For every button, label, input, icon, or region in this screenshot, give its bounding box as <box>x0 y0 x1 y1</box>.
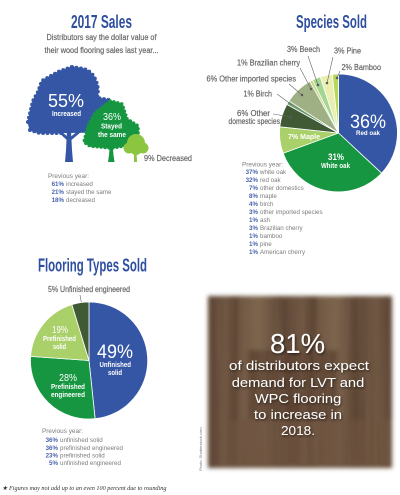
previous year list: sales <box>48 173 112 204</box>
previous year list: flooring: unfinished solid <box>60 437 103 444</box>
previous year list: species: other domestics <box>260 185 304 192</box>
callout text: demand for LVT and <box>232 375 364 390</box>
previous year list: species: 32% <box>246 177 258 184</box>
previous year list: species: 1% <box>249 217 258 224</box>
wood background <box>208 296 392 468</box>
pie value labels: species <box>288 112 386 170</box>
footnote: ★ <box>2 485 8 492</box>
title: Flooring Types Sold: Flooring Types Sold <box>38 256 147 276</box>
previous year list: sales: decreased <box>66 197 95 204</box>
species labels: 6% Other <box>237 109 270 118</box>
previous year list: species: Previous year: <box>242 162 283 168</box>
photo credit: Photo: Shutterstock.com <box>198 427 203 471</box>
previous year list: sales: 18% <box>52 197 64 204</box>
text: 55% increased: 55% <box>48 91 84 111</box>
previous year list: flooring: Previous year: <box>42 428 83 435</box>
leader line: flooring <box>80 295 82 306</box>
section: species sold <box>206 12 397 256</box>
pie value labels: flooring: 49% <box>97 342 133 363</box>
intro text <box>44 33 158 55</box>
callout text: of distributors expect <box>229 358 369 373</box>
previous year list: sales: 21% <box>52 189 64 196</box>
previous year list: species: red oak <box>260 177 282 184</box>
species labels: 3% Beech <box>287 45 320 54</box>
pie value labels: flooring: engineered <box>51 392 85 399</box>
previous year list: species: 1% <box>249 249 258 256</box>
pie value labels: species: Red oak <box>356 130 380 137</box>
pie value labels: species: 36% <box>350 112 386 133</box>
previous year list: flooring: 36% <box>46 445 58 452</box>
intro text: Distributors say the dollar value of <box>46 33 157 42</box>
previous year list: flooring: 5% <box>49 460 58 467</box>
previous year list: species: 3% <box>249 225 258 232</box>
previous year list: flooring: unfinished engineered <box>60 460 121 467</box>
previous year list: species <box>242 162 323 256</box>
pie value labels: flooring: Prefinished <box>43 336 76 343</box>
section: 2017 sales <box>28 12 192 204</box>
previous year list: flooring: 36% <box>46 437 58 444</box>
title: 2017 Sales: 2017 Sales <box>71 12 132 32</box>
text: 36% stayed the same <box>98 112 126 139</box>
previous year list: species: other imported species <box>260 209 323 216</box>
previous year list: sales: Previous year: <box>48 173 89 180</box>
previous year list: sales: increased <box>66 181 93 188</box>
callout text: 81% <box>270 328 325 359</box>
previous year list: species: American cherry <box>260 249 306 256</box>
previous year list: species: 7% <box>249 185 258 192</box>
pie value labels: flooring: solid <box>108 370 122 377</box>
previous year list: species: 1% <box>249 241 258 248</box>
pie value labels: species: 31% <box>328 152 344 163</box>
label: 9% decreased: 9% Decreased <box>144 154 192 163</box>
pie value labels: species: White oak <box>321 163 350 170</box>
text: 55% increased: Increased <box>52 111 81 118</box>
previous year list: flooring: 23% <box>46 452 58 460</box>
previous year list: species: maple <box>260 193 277 200</box>
callout text <box>229 328 369 438</box>
text: 36% stayed the same: the same <box>98 132 126 139</box>
wood grain <box>210 298 390 466</box>
species labels: 2% Bamboo <box>342 63 381 72</box>
pie value labels: flooring: 19% <box>52 325 68 336</box>
previous year list: species: 37% <box>246 169 258 176</box>
callout text: 2018. <box>281 423 315 438</box>
pie value labels: flooring <box>43 325 133 399</box>
previous year list: species: Brazilian cherry <box>260 225 304 232</box>
previous year list: sales: stayed the same <box>66 189 112 196</box>
label: 5% unfinished engineered: 5% Unfinished engineered <box>48 285 130 294</box>
previous year list: species: pine <box>260 241 272 248</box>
species labels <box>206 45 381 126</box>
previous year list: sales: 61% <box>52 181 64 188</box>
species labels: 1% Birch <box>244 90 272 98</box>
pie chart: flooring types <box>30 302 148 419</box>
icon: blue tree 55% <box>28 67 112 162</box>
icon: light green tree 9% <box>124 134 148 162</box>
pie value labels: species: 7% Maple <box>288 134 320 141</box>
previous year list: species: ash <box>260 217 271 224</box>
pie value labels: flooring: Prefinished <box>51 384 85 391</box>
callout text: WPC flooring <box>255 391 341 406</box>
callout text: to increase in <box>254 407 342 422</box>
previous year list: species: 8% <box>249 193 258 200</box>
text: 36% stayed the same: 36% <box>103 112 121 123</box>
previous year list: species: 1% <box>249 233 258 240</box>
previous year list: species: 3% <box>249 209 258 216</box>
intro text: their wood flooring sales last year... <box>44 46 158 55</box>
pie value labels: flooring: solid <box>53 344 66 351</box>
previous year list: species: 4% <box>249 201 258 208</box>
text: 36% stayed the same: Stayed <box>101 124 122 130</box>
pie chart: species <box>279 74 397 192</box>
species labels: 6% Other imported species <box>206 74 296 84</box>
pie value labels: flooring: 28% <box>59 373 77 384</box>
previous year list: species: bamboo <box>260 233 283 240</box>
species labels: domestic species <box>228 117 280 126</box>
previous year list: flooring <box>42 428 124 467</box>
icon: green tree 36% <box>84 101 138 162</box>
previous year list: species: birch <box>260 201 274 208</box>
species labels: 1% Brazilian cherry <box>237 58 300 68</box>
previous year list: flooring: prefinished solid <box>60 452 105 460</box>
panel: wood callout <box>198 296 392 471</box>
previous year list: species: white oak <box>259 169 287 176</box>
pie value labels: flooring: Unfinished <box>100 362 131 369</box>
previous year list: flooring: prefinished engineered <box>60 445 124 452</box>
section: flooring types sold <box>30 256 148 467</box>
leader lines: species <box>273 56 340 118</box>
footnote: Figures may not add up to an even 100 percent due to rounding <box>8 485 166 492</box>
species labels: 3% Pine <box>334 46 361 56</box>
